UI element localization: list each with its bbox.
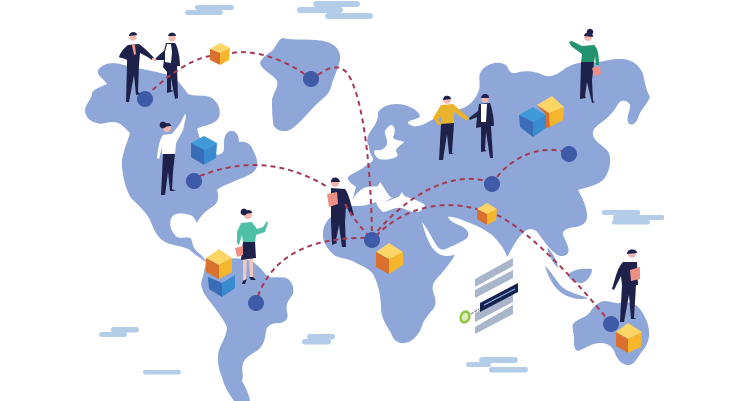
island: Borneo (568, 269, 592, 283)
figure: man in yellow sweater (433, 96, 469, 160)
route network: dashed connections (146, 52, 608, 320)
figure: man in dark suit (469, 94, 494, 158)
cube: blue North America (191, 136, 217, 165)
cubes: South America stack (206, 249, 235, 297)
continent: Australia (573, 301, 649, 365)
selected row (480, 283, 518, 312)
figure: woman waving in white shirt (157, 114, 186, 195)
continent: Americas (85, 63, 293, 401)
figure: handshake man left (119, 32, 154, 102)
figure: handshake man right (152, 33, 180, 99)
world map continents (85, 38, 650, 401)
island: Malay peninsula (547, 247, 558, 268)
cube: small yellow top (210, 43, 230, 65)
sea: Baltic (374, 125, 404, 160)
continent: Greenland (260, 38, 340, 131)
cube: yellow Australia (616, 323, 642, 353)
cubes: Asia stack (519, 96, 564, 137)
cube: small yellow India (477, 203, 497, 225)
figure: woman in teal with skirt (235, 209, 268, 284)
icon: document list with selected row (459, 258, 518, 334)
clouds (99, 1, 664, 374)
figure: businessman with folder in centre (327, 178, 354, 247)
figure: woman in green with folder (569, 29, 601, 103)
figure: man with folder on Australia (612, 249, 640, 322)
cube: yellow Africa (376, 243, 403, 274)
island: Sumatra and Java (545, 266, 588, 299)
location dots (137, 71, 619, 332)
continent: Eurasia and Africa (323, 59, 650, 343)
sea: Mediterranean (350, 182, 425, 212)
green selector (459, 309, 479, 324)
